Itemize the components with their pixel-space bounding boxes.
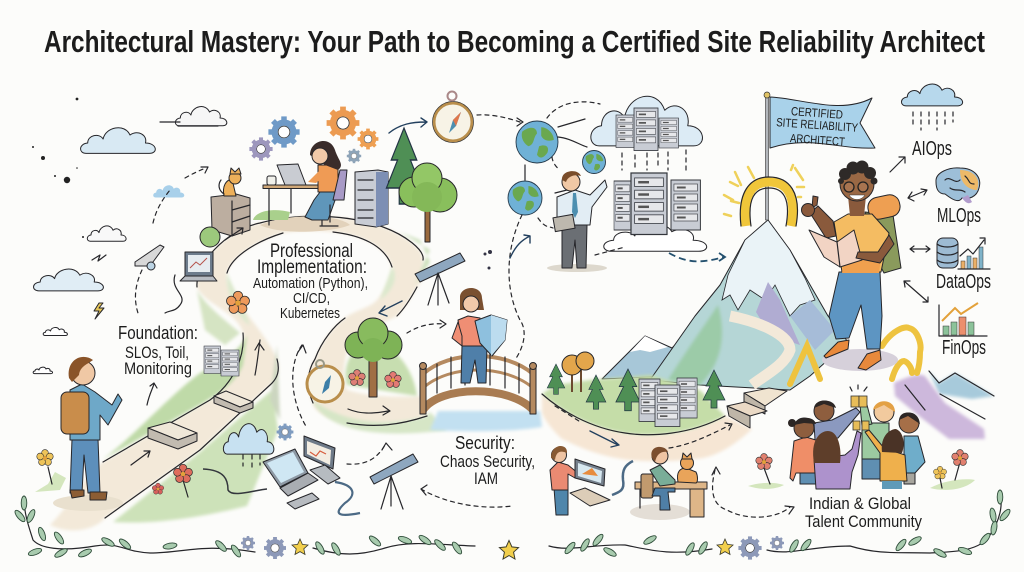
sky clouds and ink dots (32, 98, 227, 374)
foundation label: Monitoring (124, 359, 192, 378)
professional implementation label: Implementation: (257, 257, 367, 278)
server stack on cloud (604, 173, 707, 251)
telescope lower (370, 454, 418, 509)
globes (508, 121, 606, 215)
flag (770, 97, 875, 149)
community label: Indian & Global (809, 494, 911, 513)
desk (269, 187, 322, 225)
decorative vine border (13, 490, 1012, 560)
community label (805, 494, 922, 531)
meadow flowers lower right (748, 450, 975, 490)
foundation road details (131, 340, 264, 465)
steps (148, 422, 197, 440)
man at desk with cat (630, 447, 707, 520)
monitor (304, 436, 335, 469)
mountain path and steps (727, 316, 790, 428)
mlops brain: MLOps (937, 205, 981, 227)
security label: Security: (455, 433, 515, 453)
flag: SITE RELIABILITY (776, 115, 859, 135)
woman at desk (318, 165, 338, 192)
telescope upper (415, 253, 465, 305)
hilltop desk scene (200, 128, 457, 247)
laptop (277, 164, 306, 185)
woman with shield on bridge (452, 288, 507, 383)
side skill icons (901, 84, 991, 359)
cloud with rack servers (591, 96, 702, 150)
laptop on path (165, 252, 217, 313)
foundation learner (53, 357, 123, 511)
security label (440, 433, 535, 488)
community label: Talent Community (805, 512, 922, 531)
floating gears (249, 107, 378, 163)
professional implementation label: CI/CD, (293, 291, 330, 307)
foundation label: Foundation: (118, 323, 198, 343)
foundation label (118, 323, 198, 378)
road edge lines (103, 216, 427, 518)
meadow flowers lower left (35, 450, 192, 497)
dashed arrows to community (555, 406, 794, 517)
security label: IAM (474, 469, 498, 488)
aiops cloud: AIOps (912, 138, 952, 160)
laptop (263, 449, 308, 487)
finops growth chart (939, 303, 987, 359)
finops growth chart: FinOps (942, 337, 986, 359)
architectural masterclass cloud, globes and servers (508, 96, 725, 261)
toasting figures (788, 400, 925, 489)
professional implementation label (253, 241, 368, 322)
flower on path (227, 291, 249, 313)
foundation label: SLOs, Toil, (125, 343, 189, 362)
upper left sketches and dashed arrows (92, 167, 243, 319)
water under bridge (430, 411, 542, 431)
professional implementation label: Automation (Python), (253, 276, 368, 292)
dataops database and chart (936, 238, 991, 293)
road: bridge to mountain (542, 394, 752, 461)
gold horseshoe and flag at summit (724, 92, 875, 226)
arrows to skill icons (890, 157, 930, 302)
arrow on return road (379, 301, 402, 316)
chaos cloud, laptop and monitor (203, 424, 360, 515)
green hills along first road (103, 232, 447, 523)
masterclass presenter (547, 171, 607, 272)
security label: Chaos Security, (440, 452, 535, 471)
lower tree with compass and flowers (293, 318, 402, 428)
professional implementation label: Kubernetes (280, 306, 340, 322)
aiops cloud (901, 84, 963, 160)
professional implementation label: Professional (270, 241, 353, 262)
flag: CERTIFIED (791, 104, 844, 122)
green meadow with trees and servers (542, 352, 725, 435)
mlops brain (936, 168, 981, 227)
pine and tree (386, 128, 422, 204)
dataops database and chart: DataOps (936, 271, 991, 293)
wooden bridge (420, 353, 536, 414)
woman at workstation (550, 446, 633, 515)
raised glasses (851, 396, 869, 430)
road: foundation to bridge (50, 216, 427, 530)
filing cabinet with cat (211, 168, 250, 236)
mountains (602, 220, 994, 439)
talent community group (788, 385, 925, 489)
bush (200, 227, 220, 247)
dashed link arrows mid (347, 215, 530, 507)
gold arches on ridge (790, 328, 921, 384)
certified architect with backpack (802, 160, 902, 371)
flag: ARCHITECT (790, 131, 846, 149)
server rack (355, 170, 388, 227)
arrow to compass and on to globes (389, 115, 523, 133)
cables (203, 469, 267, 494)
compass top (432, 92, 474, 142)
